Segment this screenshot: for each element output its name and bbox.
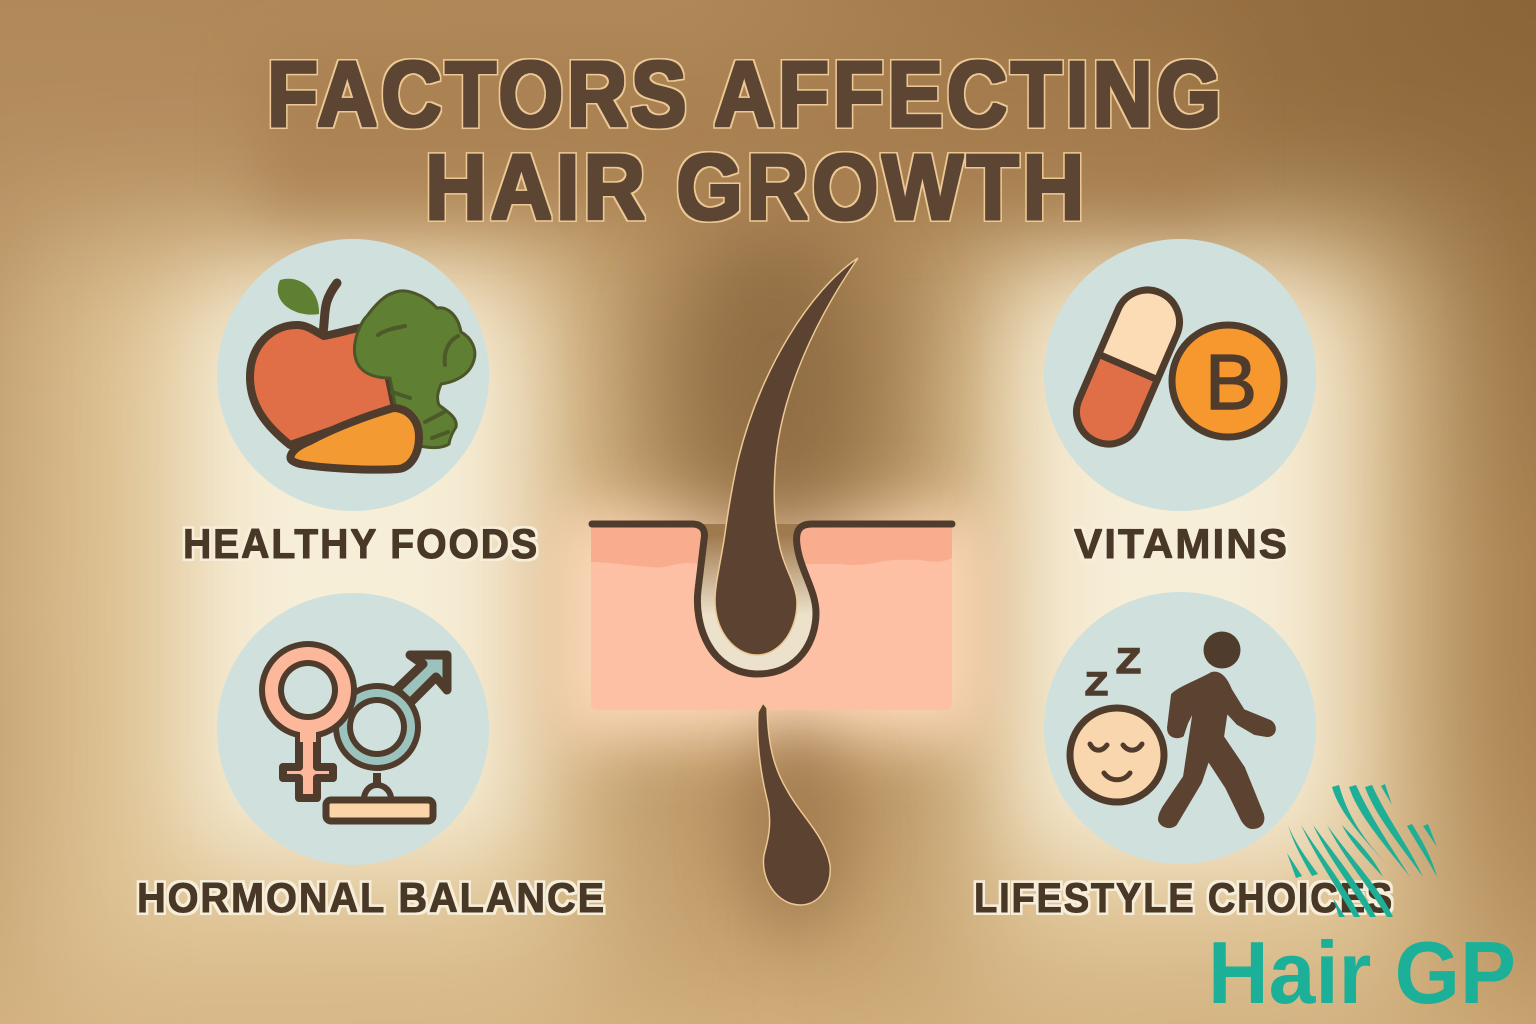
icon: vitamin B coin [1172, 325, 1284, 437]
panel: lifestyle choices [1044, 592, 1316, 864]
label: lifestyle choices: LIFESTYLE CHOICES [974, 874, 1394, 921]
panel: hormonal balance [217, 593, 489, 865]
icon: vitamin B coin: B [1205, 338, 1257, 426]
panel: healthy foods [217, 239, 489, 511]
icon: sleeping z letters: Z [1085, 666, 1108, 702]
label: hormonal balance: HORMONAL BALANCE [137, 874, 606, 921]
icon circle: hormones [217, 593, 489, 865]
title: HAIR GROWTH [425, 135, 1088, 239]
icon: carrot [290, 408, 419, 470]
icon: capsule [1066, 280, 1190, 454]
icon: apple [250, 279, 395, 445]
skin block [591, 527, 952, 710]
lower hair root [758, 703, 830, 905]
logo wordmark: Hair GP [1208, 923, 1516, 1022]
icon: balance base [326, 800, 433, 821]
label: healthy foods: HEALTHY FOODS [183, 520, 539, 567]
icon: female symbol [259, 641, 357, 798]
hair strand and bulb [715, 258, 858, 655]
icon: broccoli [354, 291, 475, 448]
icon: sleeping z letters [1085, 642, 1141, 702]
panel: vitamins [1044, 239, 1316, 511]
title: FACTORS AFFECTING [267, 42, 1225, 146]
icon: sleeping face [1070, 708, 1164, 802]
follicle [592, 524, 952, 674]
icon: walking person [1160, 632, 1274, 827]
icon: sleeping z letters: Z [1116, 642, 1141, 681]
icon: male symbol [333, 655, 447, 797]
title [267, 42, 1225, 239]
panel: hair follicle diagram [591, 258, 952, 905]
icon circle: lifestyle [1044, 592, 1316, 864]
label: vitamins: VITAMINS [1074, 520, 1289, 567]
icon circle: vitamins [1044, 239, 1316, 511]
logo mark: hair strokes [1287, 784, 1437, 917]
logo: Hair GP [1208, 784, 1516, 1022]
icon circle: foods [217, 239, 489, 511]
